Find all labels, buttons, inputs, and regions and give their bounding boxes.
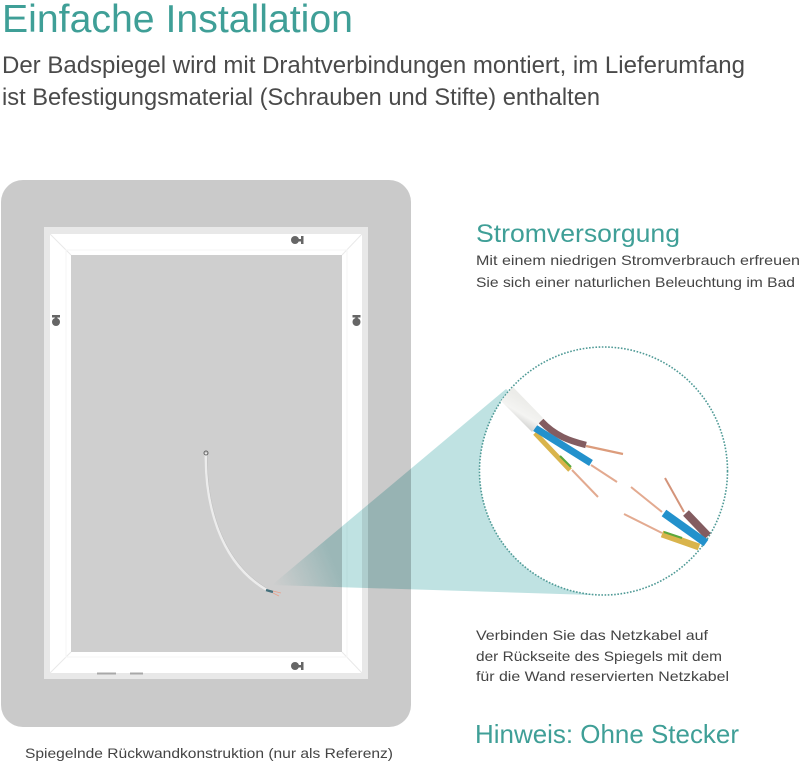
mirror cable	[204, 451, 281, 596]
text: power consumption: Sie sich einer naturlichen Beleuchtung im Bad	[476, 274, 795, 290]
text: power consumption	[476, 252, 800, 290]
icon: right hanger	[352, 315, 360, 326]
left cable end	[501, 387, 623, 497]
intro text: ist Befestigungsmaterial (Schrauben und Stifte) enthalten	[2, 84, 600, 111]
text: connection instructions: der Rückseite des Spiegels mit dem	[476, 648, 722, 664]
caption: Spiegelnde Rückwandkonstruktion (nur als Referenz)	[25, 745, 393, 761]
mirror inner panel	[71, 255, 342, 652]
panel: mirror back	[1, 180, 411, 727]
cable detail circle	[480, 347, 728, 595]
text: connection instructions: Verbinden Sie das Netzkabel auf	[476, 627, 708, 643]
mirror outer grey body	[1, 180, 411, 727]
intro text	[2, 52, 745, 111]
icon: top hanger	[291, 236, 304, 244]
text: power consumption: Mit einem niedrigen Stromverbrauch erfreuen	[476, 252, 800, 268]
icon: left hanger	[52, 315, 60, 326]
text: connection instructions: für die Wand reservierten Netzkabel	[476, 668, 729, 684]
zoom beam	[272, 389, 603, 595]
bottom slots	[97, 672, 143, 674]
right cable end	[624, 478, 708, 547]
text: connection instructions	[476, 627, 729, 684]
intro text: Der Badspiegel wird mit Drahtverbindungen montiert, im Lieferumfang	[2, 52, 745, 79]
mirror frame	[44, 227, 368, 679]
heading: Stromversorgung: Stromversorgung	[476, 220, 680, 248]
icon: bottom hanger	[291, 662, 304, 670]
note: no plug: Hinweis: Ohne Stecker	[475, 719, 739, 749]
cable sheath	[501, 387, 543, 432]
